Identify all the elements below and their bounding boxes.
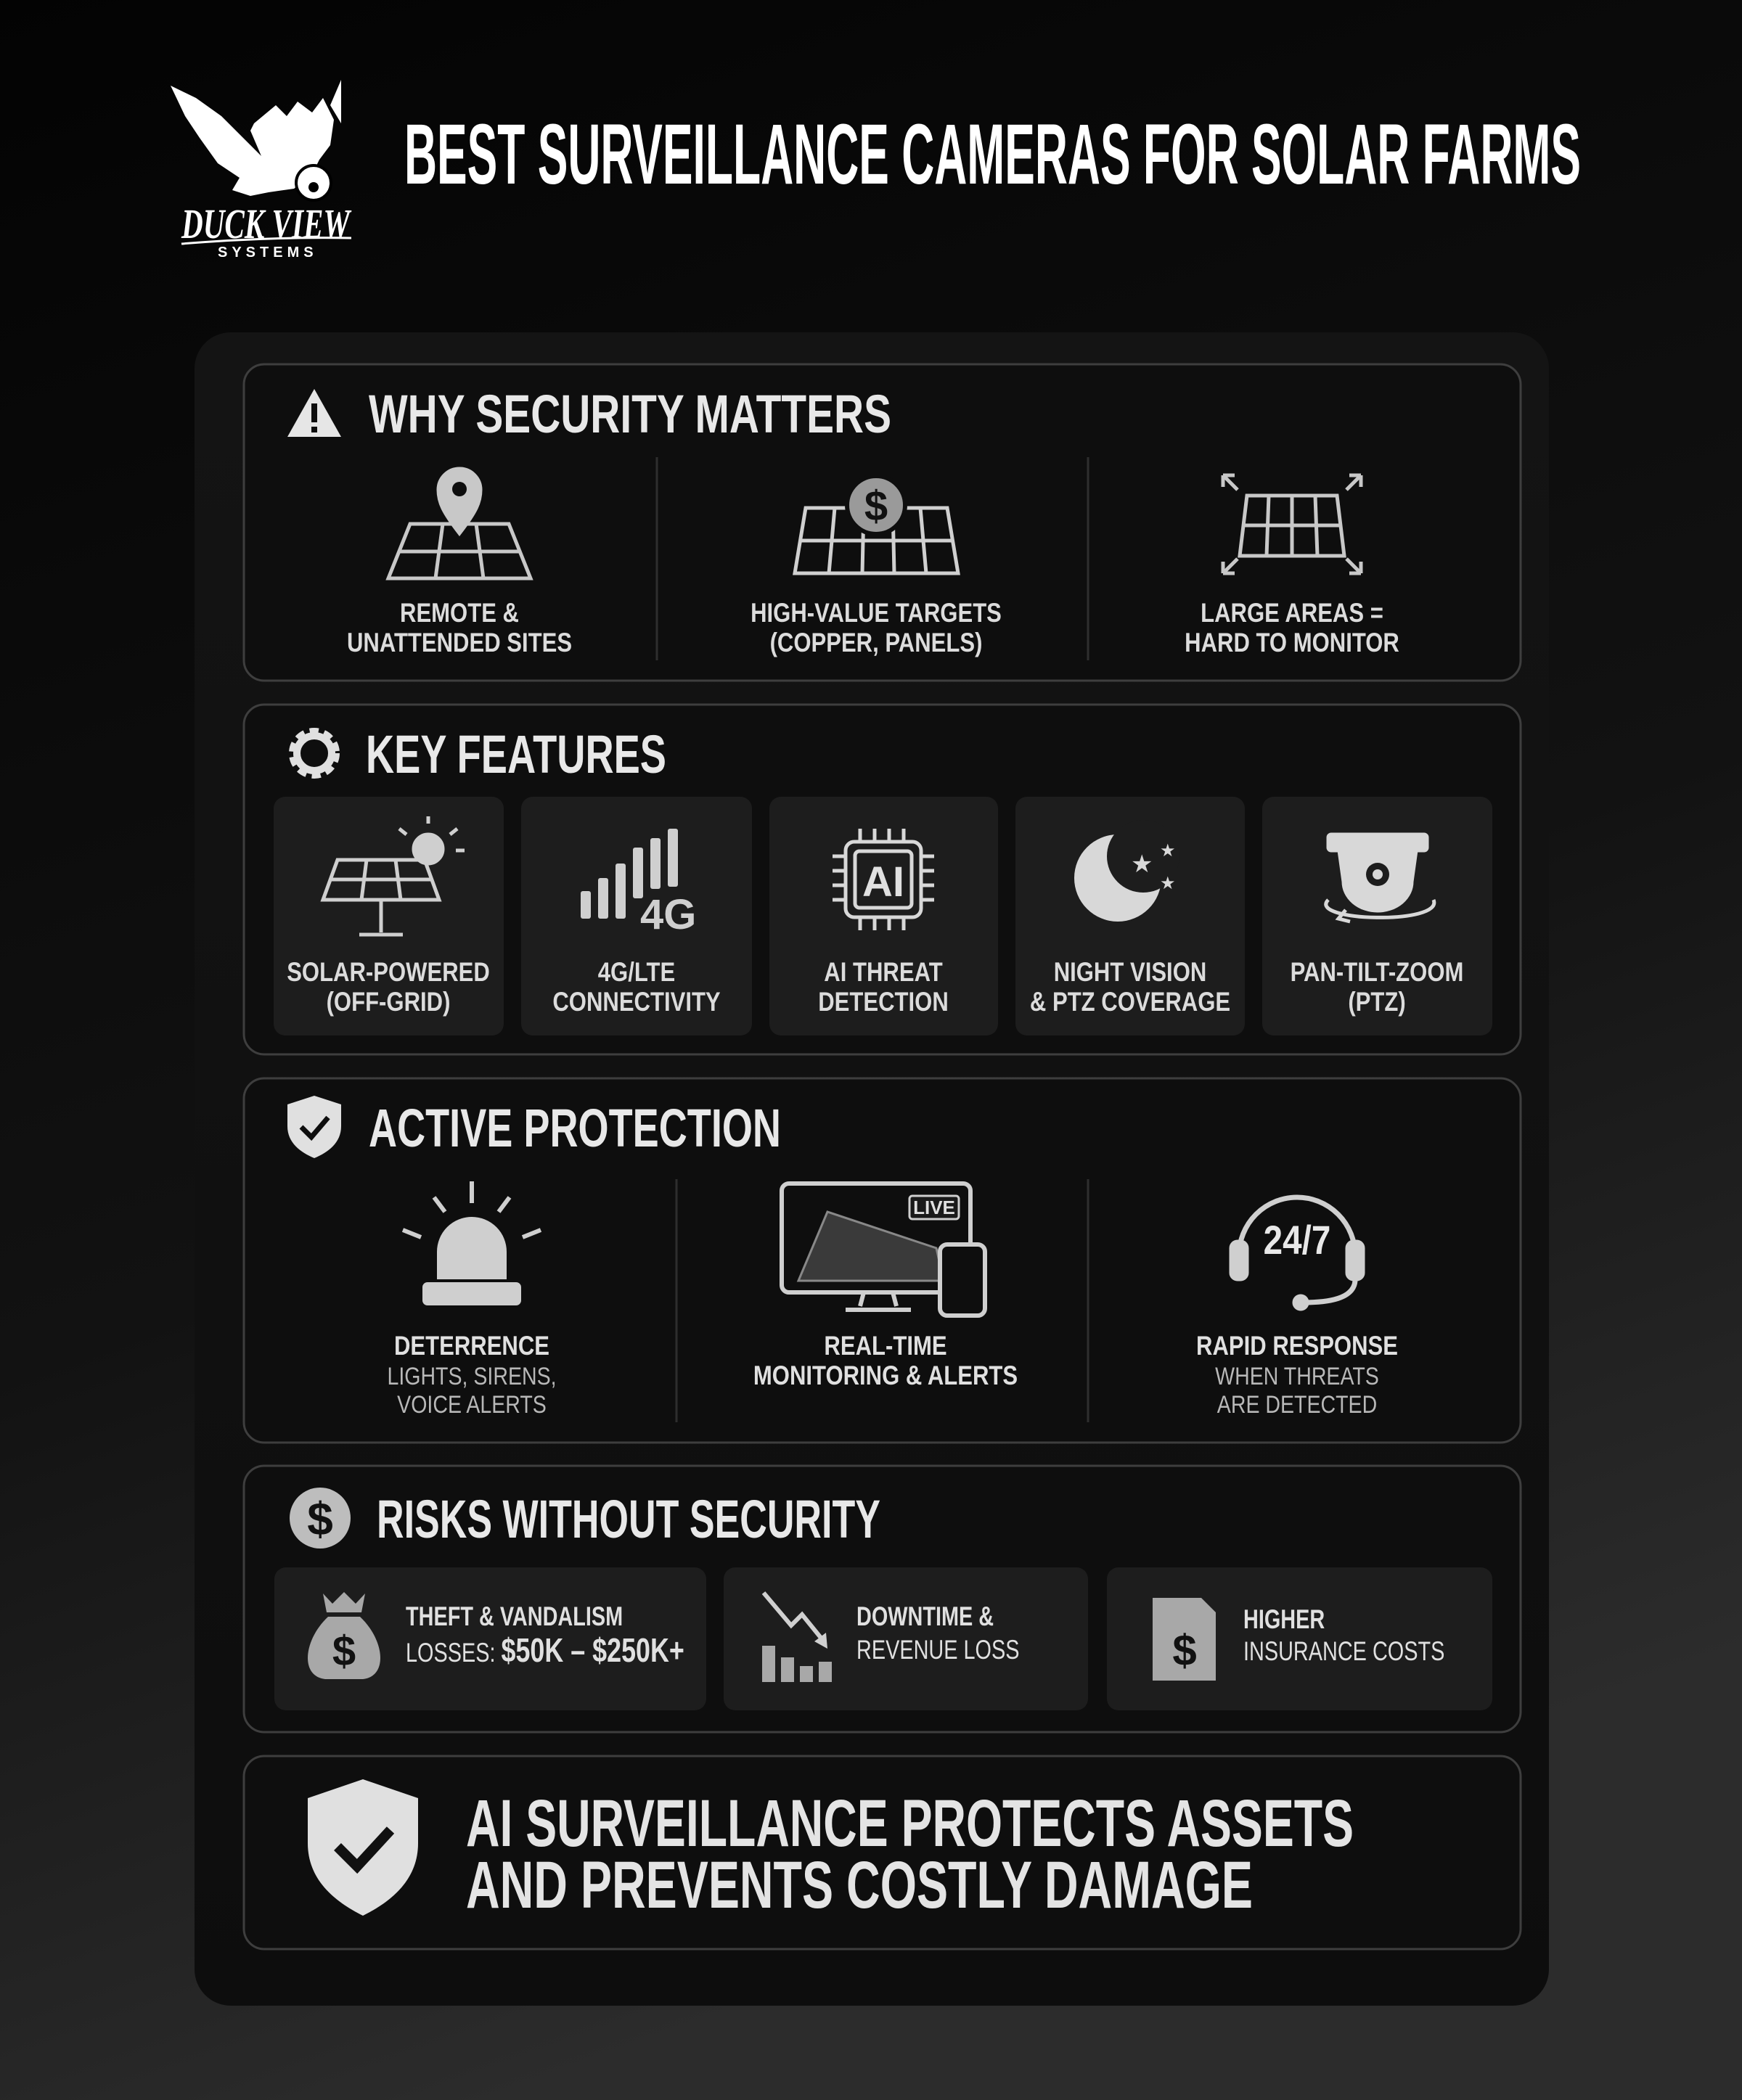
labels: protection: VOICE ALERTS	[397, 1391, 547, 1419]
labels: features: 4G/LTE	[598, 958, 675, 988]
icon: 4G signal: 4G	[640, 891, 696, 938]
labels: protection: DETERRENCE	[394, 1332, 549, 1361]
label: remote sites: UNATTENDED SITES	[347, 628, 572, 658]
icon: insurance document: $	[1172, 1626, 1197, 1675]
icon: dollar circle: $	[307, 1493, 333, 1545]
risk labels	[406, 1602, 1444, 1669]
labels: features: DETECTION	[818, 988, 949, 1017]
label: large areas: LARGE AREAS =	[1201, 599, 1383, 628]
icon: gear	[294, 733, 335, 774]
panel: active protection	[244, 1078, 1521, 1443]
label: high-value targets: (COPPER, PANELS)	[770, 628, 982, 658]
icon: headset 24/7	[1232, 1197, 1362, 1308]
icon: panels with dollar: $	[864, 483, 888, 530]
icon: PTZ camera	[1326, 834, 1434, 922]
labels: features: CONNECTIVITY	[552, 988, 721, 1017]
icon: moon and stars: ★	[1160, 874, 1176, 893]
icon: map pin on grid	[388, 469, 531, 578]
icon: big shield	[308, 1779, 418, 1916]
risk labels: REVENUE LOSS	[856, 1636, 1019, 1665]
icon: moon and stars	[1074, 820, 1179, 922]
icon: 4G signal	[581, 829, 696, 938]
icon: AI chip: AI	[862, 858, 904, 906]
heading: RISKS WITHOUT SECURITY	[377, 1489, 880, 1549]
labels: features	[287, 958, 1463, 1017]
icon: headset 24/7: 24/7	[1264, 1218, 1330, 1263]
icon: warning	[287, 389, 341, 437]
icon: large area grid with arrows	[1223, 475, 1361, 573]
heading: ACTIVE PROTECTION	[369, 1098, 781, 1158]
logo: Duck View Systems	[171, 80, 351, 261]
icon: downward chart	[762, 1593, 832, 1682]
labels: features: & PTZ COVERAGE	[1030, 988, 1230, 1017]
icon: AI chip	[833, 829, 934, 930]
conclusion text	[466, 1787, 1354, 1922]
labels: features: PAN-TILT-ZOOM	[1291, 958, 1463, 988]
main card	[195, 332, 1549, 2006]
logo: Duck View Systems: SYSTEMS	[218, 245, 318, 261]
labels: protection: LIGHTS, SIRENS,	[387, 1363, 557, 1390]
labels: protection: RAPID RESPONSE	[1196, 1332, 1398, 1361]
icon: monitor live	[782, 1184, 985, 1316]
label: remote sites	[347, 599, 572, 658]
icon: insurance document	[1153, 1598, 1216, 1681]
panel: key features	[244, 705, 1521, 1054]
risk labels: INSURANCE COSTS	[1243, 1637, 1444, 1667]
logo: Duck View Systems: DUCK VIEW	[181, 200, 351, 247]
label: high-value targets	[751, 599, 1002, 658]
labels: protection: REAL-TIME	[824, 1332, 947, 1361]
conclusion text: AI SURVEILLANCE PROTECTS ASSETS	[466, 1787, 1354, 1861]
panel: why security matters	[244, 364, 1521, 681]
panel: risks without security	[244, 1466, 1521, 1732]
label: large areas	[1185, 599, 1399, 658]
labels: protection	[387, 1332, 1398, 1419]
panel: conclusion	[244, 1756, 1521, 1949]
label: high-value targets: HIGH-VALUE TARGETS	[751, 599, 1002, 628]
icon: money bag	[308, 1592, 380, 1679]
heading: KEY FEATURES	[366, 724, 666, 784]
labels: features: SOLAR-POWERED	[287, 958, 490, 988]
icon: panels with dollar	[795, 476, 958, 573]
icon: moon and stars: ★	[1160, 841, 1176, 861]
icon: money bag: $	[332, 1628, 356, 1675]
icon: siren	[403, 1181, 541, 1303]
icon: moon and stars: ★	[1131, 850, 1153, 878]
conclusion text: AND PREVENTS COSTLY DAMAGE	[466, 1848, 1253, 1922]
risk labels: THEFT & VANDALISM	[406, 1602, 623, 1632]
risk labels: DOWNTIME &	[856, 1602, 994, 1632]
labels: protection: ARE DETECTED	[1217, 1391, 1377, 1419]
labels: features: AI THREAT	[824, 958, 943, 988]
label: large areas: HARD TO MONITOR	[1185, 628, 1399, 658]
label: remote sites: REMOTE &	[400, 599, 519, 628]
icon: monitor live: LIVE	[913, 1197, 955, 1218]
risk labels: LOSSES: $50K – $250K+	[406, 1632, 684, 1669]
risk labels: HIGHER	[1243, 1605, 1325, 1635]
icon: dollar circle	[290, 1488, 351, 1549]
labels: protection: MONITORING & ALERTS	[753, 1361, 1018, 1391]
icon: solar panel with sun	[323, 816, 465, 935]
labels: features: (OFF-GRID)	[327, 988, 450, 1017]
labels: protection: WHEN THREATS	[1215, 1363, 1379, 1390]
heading: WHY SECURITY MATTERS	[369, 384, 891, 444]
icon: shield check	[287, 1096, 341, 1158]
labels: features: NIGHT VISION	[1054, 958, 1206, 988]
labels: features: (PTZ)	[1348, 988, 1406, 1017]
